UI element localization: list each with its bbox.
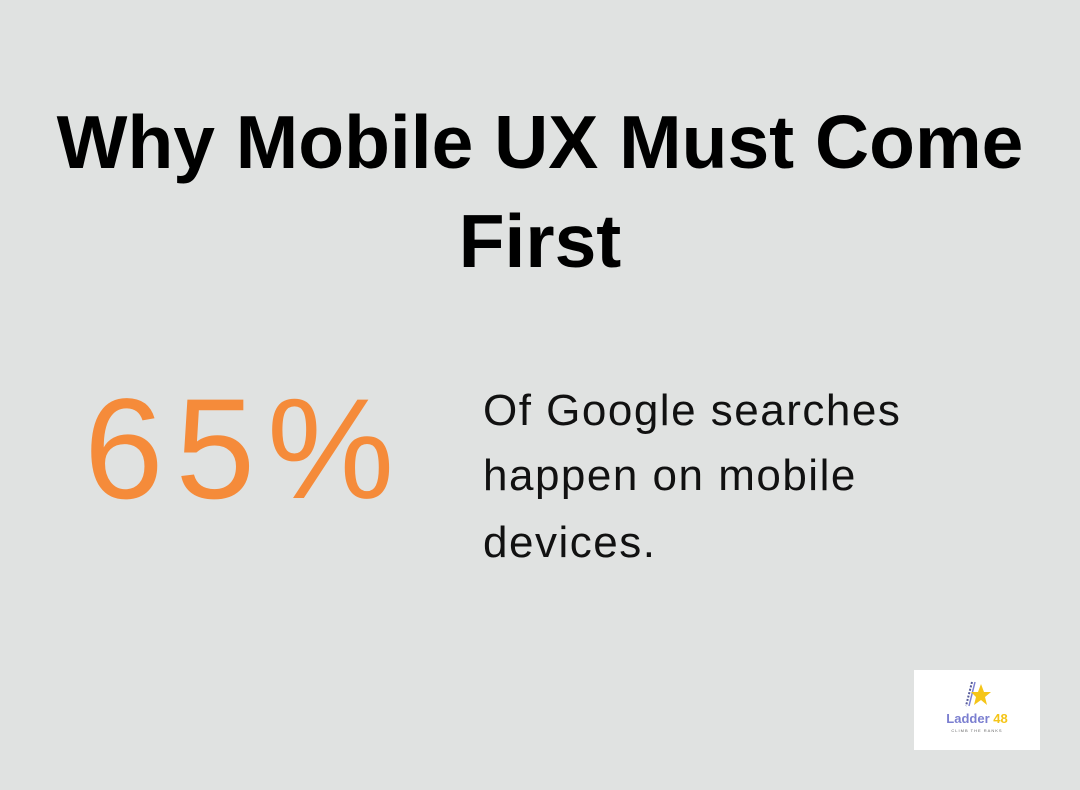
icon: ladder star (965, 682, 991, 706)
title (56, 100, 1023, 283)
logo: Ladder 48 (914, 670, 1040, 750)
logo: Ladder 48: Ladder 48 (946, 711, 1008, 726)
title: First (459, 199, 621, 283)
description text: Of Google searches (483, 386, 901, 435)
logo: Ladder 48: CLIMB THE RANKS (951, 728, 1003, 733)
description text: happen on mobile (483, 451, 857, 500)
description text: devices. (483, 518, 656, 567)
title: Why Mobile UX Must Come (57, 100, 1023, 184)
description text (483, 386, 901, 567)
big stat 65%: 65% (84, 370, 406, 529)
